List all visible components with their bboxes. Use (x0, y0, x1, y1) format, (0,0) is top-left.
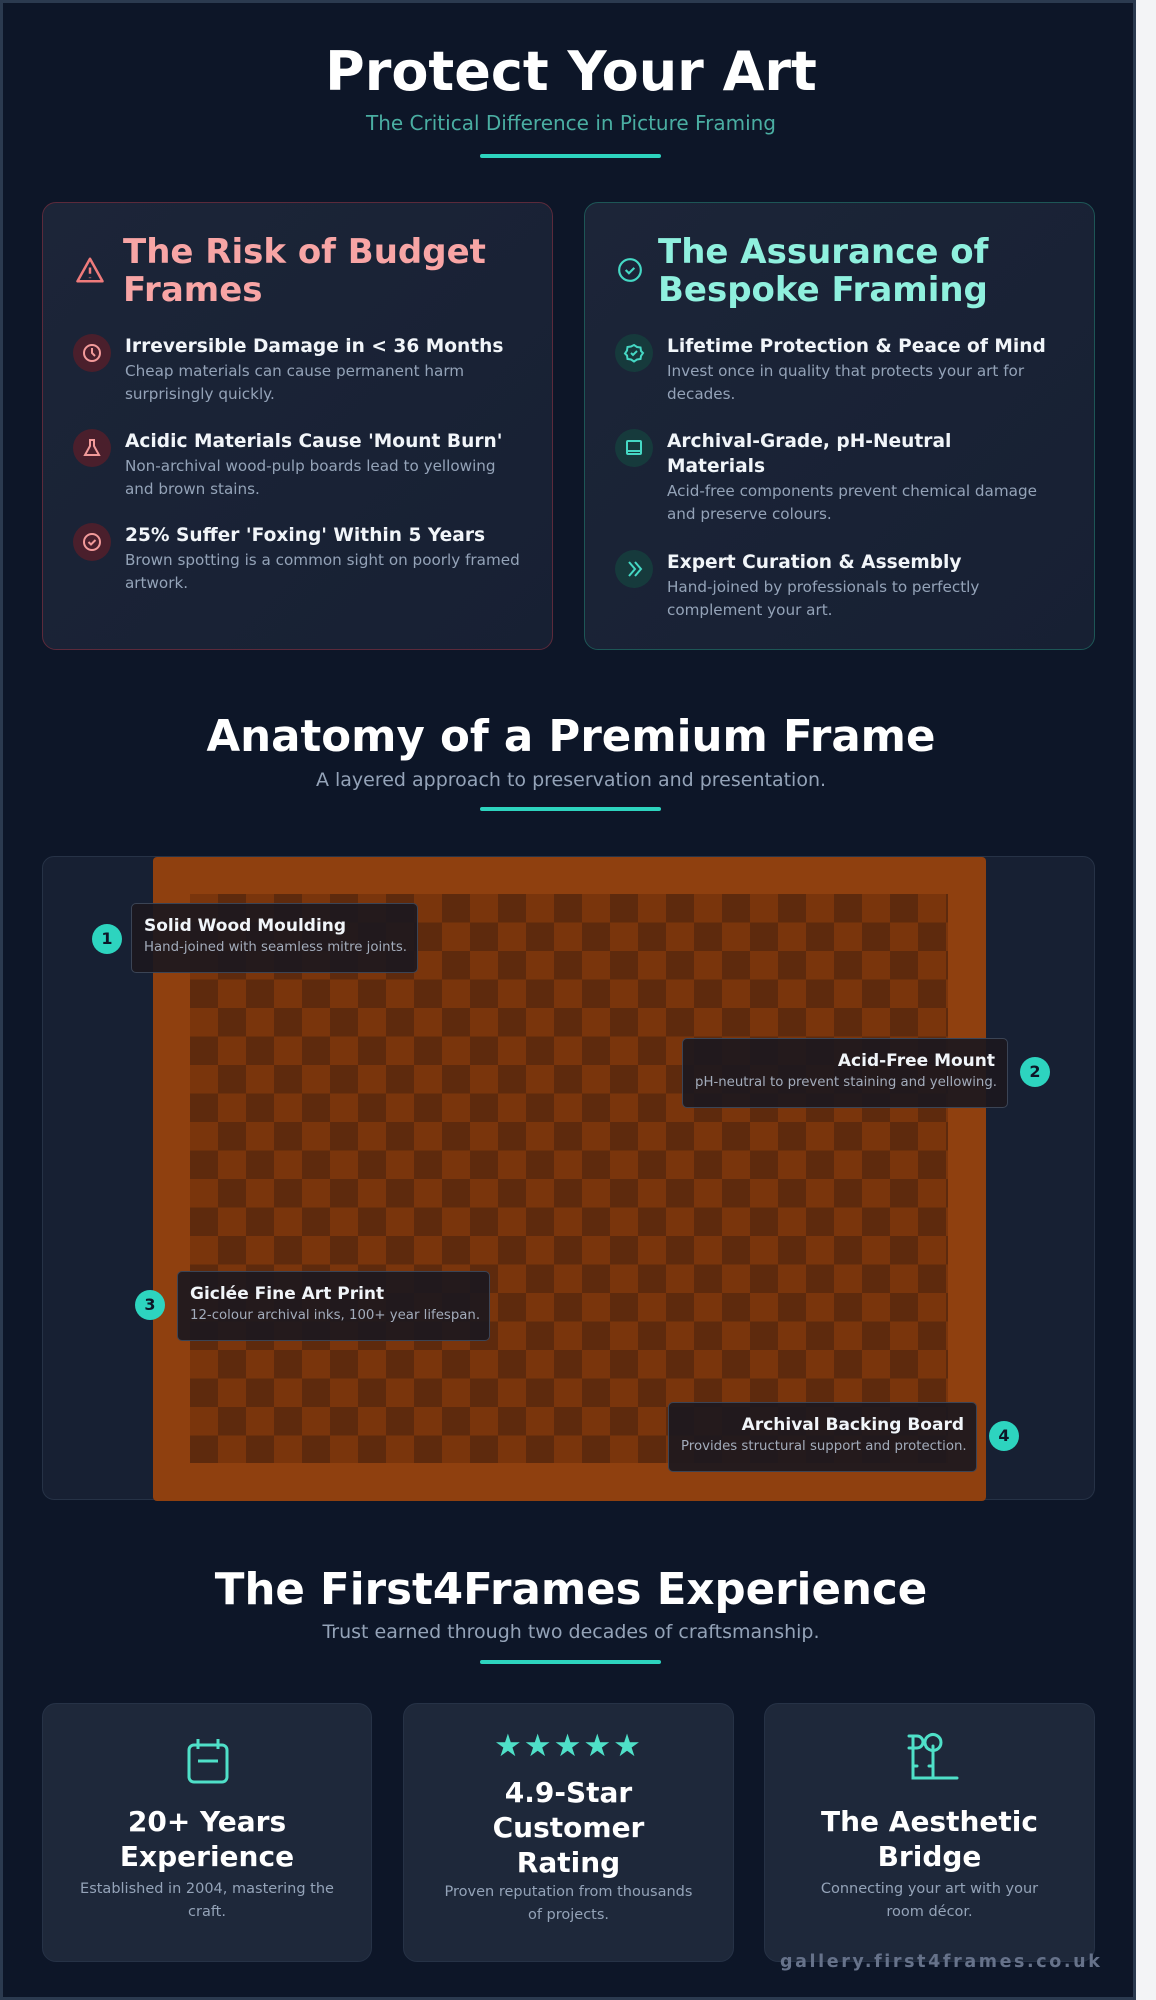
section heading: anatomy: Anatomy of a Premium Frame (206, 712, 936, 762)
heading: Bespoke Framing (658, 270, 988, 310)
card: aesthetic bridge: Connecting your art with your room décor. (821, 1881, 1038, 1920)
callout 3: 3 (144, 1295, 156, 1314)
panel: assurance of bespoke framing: Lifetime Protection & Peace of Mind (667, 336, 1046, 357)
card: rating: 4.9-Star Customer Rating (493, 1776, 644, 1879)
subtitle: The Critical Difference in Picture Framing (366, 111, 776, 135)
callout 4 (668, 1402, 1019, 1472)
panel: risk of budget frames: Acidic Materials Cause 'Mount Burn' (125, 431, 502, 452)
card: rating (403, 1703, 734, 1962)
panel: risk of budget frames: 25% Suffer 'Foxing' Within 5 Years (125, 525, 485, 546)
item: damage (73, 334, 503, 403)
callout 3: 12-colour archival inks, 100+ year lifespan. (190, 1308, 480, 1323)
item: acidic (73, 429, 502, 498)
item: expert (615, 550, 979, 619)
card: years: 20+ Years (128, 1805, 286, 1838)
icon: bridge (908, 1732, 958, 1780)
panel: assurance of bespoke framing: Archival-Grade, pH-Neutral Materials (667, 431, 951, 477)
heading (123, 232, 486, 310)
heading: The Assurance of (658, 232, 988, 272)
card: years: Experience (120, 1840, 294, 1873)
watermark: gallery.first4frames.co.uk (780, 1952, 1102, 1972)
card: rating: Proven reputation from thousands of projects. (445, 1884, 692, 1923)
callout 1: 1 (101, 929, 113, 948)
callout 2: 2 (1029, 1062, 1041, 1081)
card: aesthetic bridge: The Aesthetic Bridge (821, 1805, 1038, 1873)
callout 4: Provides structural support and protection. (681, 1439, 967, 1454)
callout 2: pH-neutral to prevent staining and yellowing. (695, 1075, 997, 1090)
callout 1: Solid Wood Moulding (144, 916, 346, 936)
card: aesthetic bridge (764, 1703, 1095, 1962)
callout 3: Giclée Fine Art Print (190, 1284, 384, 1304)
section heading: experience: The First4Frames Experience (215, 1565, 927, 1615)
panel: risk of budget frames: Irreversible Damage in < 36 Months (125, 336, 503, 357)
item: foxing (73, 523, 520, 592)
heading (658, 232, 989, 310)
icon: check circle (618, 258, 642, 282)
artwork checker (190, 894, 948, 1463)
panel: assurance of bespoke framing (584, 202, 1095, 650)
panel: risk of budget frames (42, 202, 553, 650)
frame moulding (153, 857, 986, 1501)
heading: The Risk of Budget (123, 232, 486, 272)
callout 1 (92, 903, 418, 973)
panel: risk of budget frames: Non-archival wood-pulp boards lead to yellowing and brown stains. (125, 457, 496, 498)
subtitle: experience: Trust earned through two decades of craftsmanship. (322, 1621, 820, 1643)
panel: risk of budget frames: Brown spotting is a common sight on poorly framed artwork. (125, 551, 520, 592)
item: archival (615, 429, 1037, 523)
panel: assurance of bespoke framing: Expert Curation & Assembly (667, 552, 962, 573)
item: lifetime (615, 334, 1046, 403)
callout 1: Hand-joined with seamless mitre joints. (144, 940, 407, 955)
callout 4: Archival Backing Board (742, 1415, 964, 1435)
card: years (42, 1703, 372, 1962)
callout 3 (135, 1271, 490, 1341)
panel: risk of budget frames: Cheap materials can cause permanent harm surprisingly quickly. (125, 362, 464, 403)
subtitle: anatomy: A layered approach to preservation and presentation. (316, 769, 826, 791)
panel: assurance of bespoke framing: Hand-joined by professionals to perfectly complement your art. (667, 578, 979, 619)
callout 2: Acid-Free Mount (838, 1051, 995, 1071)
panel: assurance of bespoke framing: Invest once in quality that protects your art for decades. (667, 362, 1024, 403)
icon: warning (76, 258, 104, 282)
icon: calendar (188, 1739, 228, 1784)
heading: Frames (123, 270, 262, 310)
callout 4: 4 (998, 1426, 1010, 1445)
card: years: Established in 2004, mastering the craft. (80, 1881, 334, 1920)
panel: assurance of bespoke framing: Acid-free components prevent chemical damage and preserve colours. (667, 482, 1037, 523)
frame diagram (42, 856, 1095, 1500)
title: Protect Your Art (325, 40, 817, 103)
callout 2 (682, 1038, 1050, 1108)
icon: stars: ★★★★★ (494, 1728, 643, 1764)
